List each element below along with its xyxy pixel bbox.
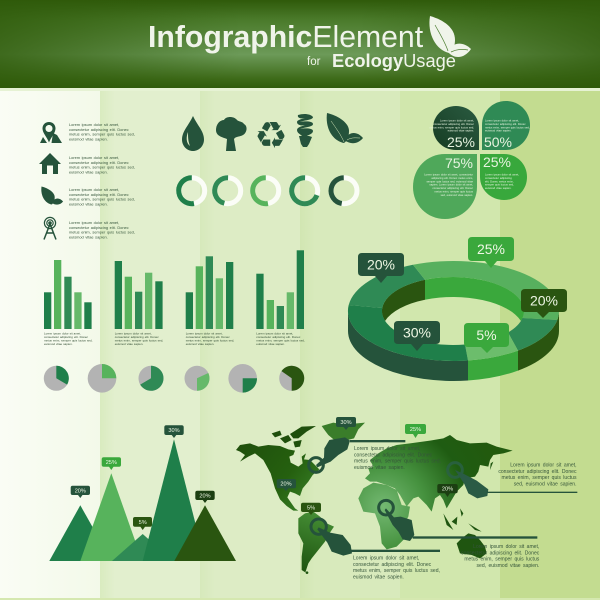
bar chart group 2: consectetur adipiscing elit. Donec — [115, 335, 159, 339]
petal: 75%: metus enim, semper quis luctus — [434, 190, 474, 194]
title: InfographicElement — [148, 21, 424, 54]
icon: house — [39, 153, 61, 174]
petal: 25% dark: metus enim, semper quis luctus sed, — [429, 125, 474, 129]
map text: australia: sed, euismod vitae sapien. — [477, 563, 539, 569]
donut gauges — [177, 174, 359, 207]
label: 25%: 25% — [106, 460, 117, 466]
icon: tree — [216, 117, 247, 151]
pie 1 — [44, 366, 69, 391]
map text: south america: euismod vitae sapien. — [353, 574, 404, 580]
text: item one: consectetur adipiscing elit. Donec — [69, 127, 129, 132]
text: item two: euismod vitae sapien. — [69, 169, 108, 174]
bar chart group 3: euismod vitae sapien. — [186, 342, 214, 346]
icon: water drop — [182, 116, 204, 151]
eurasia — [365, 435, 513, 512]
peak 1 — [49, 505, 112, 561]
map label: 20% left: 20% — [280, 482, 292, 488]
greenland — [322, 423, 365, 441]
petal: 75%: sed, euismod vitae sapien. — [441, 193, 473, 197]
map label: 20% right: 20% — [442, 487, 453, 493]
donut 3 — [251, 176, 281, 206]
bar chart group 3 — [186, 256, 234, 346]
label: 25% — [102, 457, 121, 470]
pie 6 — [279, 366, 304, 391]
map label: 20% left — [277, 479, 296, 491]
icon: recycle: ♻ — [254, 114, 288, 157]
petal: 75% — [413, 154, 477, 219]
label: 30% — [164, 425, 184, 438]
petal: 50%: 50% — [484, 134, 512, 150]
text: item three: euismod vitae sapien. — [69, 201, 108, 206]
peak 2 — [80, 473, 142, 561]
africa — [358, 483, 410, 549]
petal: 25% bright: 25% — [483, 154, 511, 170]
text: item four: metus enim, semper quis luctus sed, — [69, 230, 135, 235]
icon: antenna tower — [44, 217, 56, 240]
text: item two: consectetur adipiscing elit. Donec — [69, 160, 129, 165]
map text: south america: metus enim, semper quis luctus sed, — [353, 568, 440, 574]
petal: 75%: sapien. Lorem ipsum dolor sit amet, — [429, 183, 473, 187]
eco icon row — [182, 113, 363, 157]
callout: 25% — [468, 237, 514, 268]
bar chart group 1: metus enim, semper quis luctus sed, — [44, 338, 93, 342]
ring outer walls — [348, 311, 559, 381]
petal: 25% dark — [429, 106, 479, 150]
donut 1 — [177, 176, 207, 206]
icon: light bulb — [297, 114, 313, 147]
peak 5 — [174, 505, 236, 561]
petal: 25% dark: 25% — [447, 134, 475, 150]
petal: 25% dark: Lorem ipsum dolor sit amet, — [440, 118, 474, 122]
world map — [236, 417, 577, 580]
bar chart group 2: metus enim, semper quis luctus sed, — [115, 338, 163, 342]
petal: 25% bright: consectetur adipiscing — [485, 176, 512, 180]
bar chart group 3: consectetur adipiscing elit. Donec — [186, 335, 230, 339]
3D ring chart — [348, 237, 567, 381]
pointer: south america — [311, 519, 440, 556]
bar chart group 2 — [115, 261, 163, 346]
icon: map pin — [40, 122, 62, 143]
petal: 75%: consectetur adipiscing elit. Donec — [432, 186, 474, 190]
petal: 75%: Lorem ipsum dolor sit amet, consectetur — [424, 172, 473, 176]
callout: 20% right — [521, 289, 567, 318]
callout: 25%: 25% — [477, 241, 505, 257]
callout: 5%: 5% — [476, 327, 497, 343]
bar chart group 4: metus enim, semper quis luctus sed, — [256, 338, 305, 342]
label: 20% — [71, 486, 90, 498]
bar chart group 4: consectetur adipiscing elit. Donec — [256, 335, 301, 339]
map text: australia: metus enim, semper quis luctus — [464, 557, 540, 563]
label: 20% right — [195, 491, 215, 503]
callout: 20% right: 20% — [530, 292, 558, 308]
petal: 50%: metus enim, semper quis luctus sed, — [485, 125, 530, 129]
bar chart group 1 — [44, 260, 93, 346]
text: item one: metus enim, semper quis luctus sed, — [69, 132, 135, 137]
map label: 25%: 25% — [410, 427, 421, 433]
bar chart group 2: Lorem ipsum dolor sit amet, — [115, 332, 152, 336]
pie 4 — [184, 366, 210, 391]
peak 3 — [112, 534, 173, 561]
map text: asia: sed, euismod vitae sapien. — [514, 481, 576, 487]
label: 5%: 5% — [139, 520, 147, 526]
pointer: africa — [379, 500, 537, 541]
map text: south america: Lorem ipsum dolor sit amet, — [353, 556, 419, 562]
map label: 5%: 5% — [307, 505, 315, 511]
map label: 30% — [336, 417, 356, 430]
text: item two: Lorem ipsum dolor sit amet, — [69, 155, 119, 160]
southeast asia islands — [443, 462, 493, 532]
label: 20% right: 20% — [199, 494, 211, 500]
petal: 75%: semper quis luctus sed, euismod vitae — [426, 179, 474, 183]
arctic islands — [272, 426, 316, 447]
text: item one: euismod vitae sapien. — [69, 136, 108, 141]
petal: 50% — [482, 101, 530, 150]
map text: asia: consectetur adipiscing elit. Donec — [498, 469, 577, 475]
petal: 50%: euismod vitae sapien. — [485, 129, 512, 133]
petal: 25% bright: elit. Donec metus enim, — [485, 179, 514, 183]
pointer: north america — [309, 437, 405, 472]
bar chart group 1: consectetur adipiscing elit. Donec — [44, 335, 89, 339]
north america — [236, 443, 319, 511]
mountain chart — [49, 425, 236, 561]
petal: 75%: adipiscing elit. Donec metus enim, — [431, 176, 473, 180]
map text: australia: consectetur adipiscing elit. Donec — [461, 550, 540, 556]
map label: 30%: 30% — [340, 420, 352, 426]
label: 5% — [133, 517, 152, 530]
map text: north: Lorem ipsum dolor sit amet, — [354, 446, 420, 452]
header banner — [0, 0, 600, 88]
petal: 25% bright: Lorem ipsum dolor sit amet, — [485, 172, 519, 176]
callout: 5% — [464, 323, 509, 353]
icon: header leaves — [429, 16, 471, 57]
ring top surface — [348, 261, 559, 361]
title: EcologyUsage — [332, 50, 456, 71]
callout: 20% left: 20% — [367, 256, 395, 272]
map text: south america: consectetur adipiscing elit. Donec — [353, 562, 432, 568]
ring inner walls — [382, 277, 524, 321]
map text: asia: Lorem ipsum dolor sit amet, — [510, 462, 576, 468]
continents — [236, 423, 513, 574]
bar chart group 1: euismod vitae sapien. — [44, 342, 73, 346]
peak 4 — [143, 439, 205, 561]
bar chart group 4: Lorem ipsum dolor sit amet, — [256, 332, 293, 336]
bar chart group 2: euismod vitae sapien. — [115, 342, 143, 346]
petal: 25% dark: consectetur adipiscing elit. Donec — [433, 122, 475, 126]
petal: 50%: Lorem ipsum dolor sit amet, — [485, 118, 519, 122]
map text: north: euismod vitae sapien. — [354, 465, 405, 471]
icon: leaves small — [41, 186, 63, 205]
text: item one: Lorem ipsum dolor sit amet, — [69, 122, 119, 127]
pie 5 — [228, 364, 257, 393]
south america — [298, 512, 334, 572]
bar chart group 4: euismod vitae sapien. — [256, 342, 285, 346]
bar chart group 3: Lorem ipsum dolor sit amet, — [186, 332, 223, 336]
petal: 25% bright — [480, 154, 527, 200]
map label: 25% — [405, 424, 426, 438]
map text: north: consectetur adipiscing elit. Donec — [354, 452, 433, 458]
pointer: asia — [448, 463, 577, 498]
donut 4 — [288, 174, 321, 207]
title — [148, 21, 456, 71]
text: item four: euismod vitae sapien. — [69, 234, 108, 239]
pie 3 — [138, 366, 164, 391]
map label: 20% right — [437, 484, 458, 497]
text: item two: metus enim, semper quis luctus sed, — [69, 165, 135, 170]
callout: 30% — [394, 321, 440, 351]
australia — [457, 533, 487, 558]
map text: north: metus enim, semper quis luctus sed, — [354, 459, 441, 465]
text: item three: Lorem ipsum dolor sit amet, — [69, 187, 119, 192]
bar chart group 1: Lorem ipsum dolor sit amet, — [44, 332, 81, 336]
callout: 20% left — [358, 253, 404, 283]
label: 30%: 30% — [168, 428, 180, 434]
map text: australia: Lorem ipsum dolor sit amet, — [473, 544, 539, 550]
map text: asia: metus enim, semper quis luctus — [502, 475, 577, 481]
petal: 25% bright: euismod vitae sapien. — [485, 186, 512, 190]
text: item three: metus enim, semper quis luctus sed, — [69, 197, 135, 202]
title: for — [307, 56, 321, 68]
bar chart group 4 — [256, 250, 305, 346]
donut 2 — [212, 175, 244, 207]
pie charts — [44, 364, 304, 393]
pie 2 — [88, 364, 116, 393]
text: item three: consectetur adipiscing elit. Donec — [69, 192, 129, 197]
petal: 50%: consectetur adipiscing elit. Donec — [485, 122, 526, 126]
bar chart group 3: metus enim, semper quis luctus sed, — [186, 338, 234, 342]
label: 20%: 20% — [75, 488, 86, 494]
donut 5 — [329, 176, 359, 206]
icon: leaves — [327, 113, 363, 143]
clover callout — [413, 101, 530, 219]
petal: 25% bright: semper quis luctus sed, — [485, 183, 514, 187]
map label: 5% — [301, 503, 321, 515]
petal: 75%: 75% — [445, 155, 473, 171]
petal: 25% dark: euismod vitae sapien. — [448, 129, 474, 133]
text: item four: consectetur adipiscing elit. Donec — [69, 225, 129, 230]
text: item four: Lorem ipsum dolor sit amet, — [69, 220, 119, 225]
callout: 30%: 30% — [403, 324, 431, 340]
icon list — [39, 122, 135, 240]
